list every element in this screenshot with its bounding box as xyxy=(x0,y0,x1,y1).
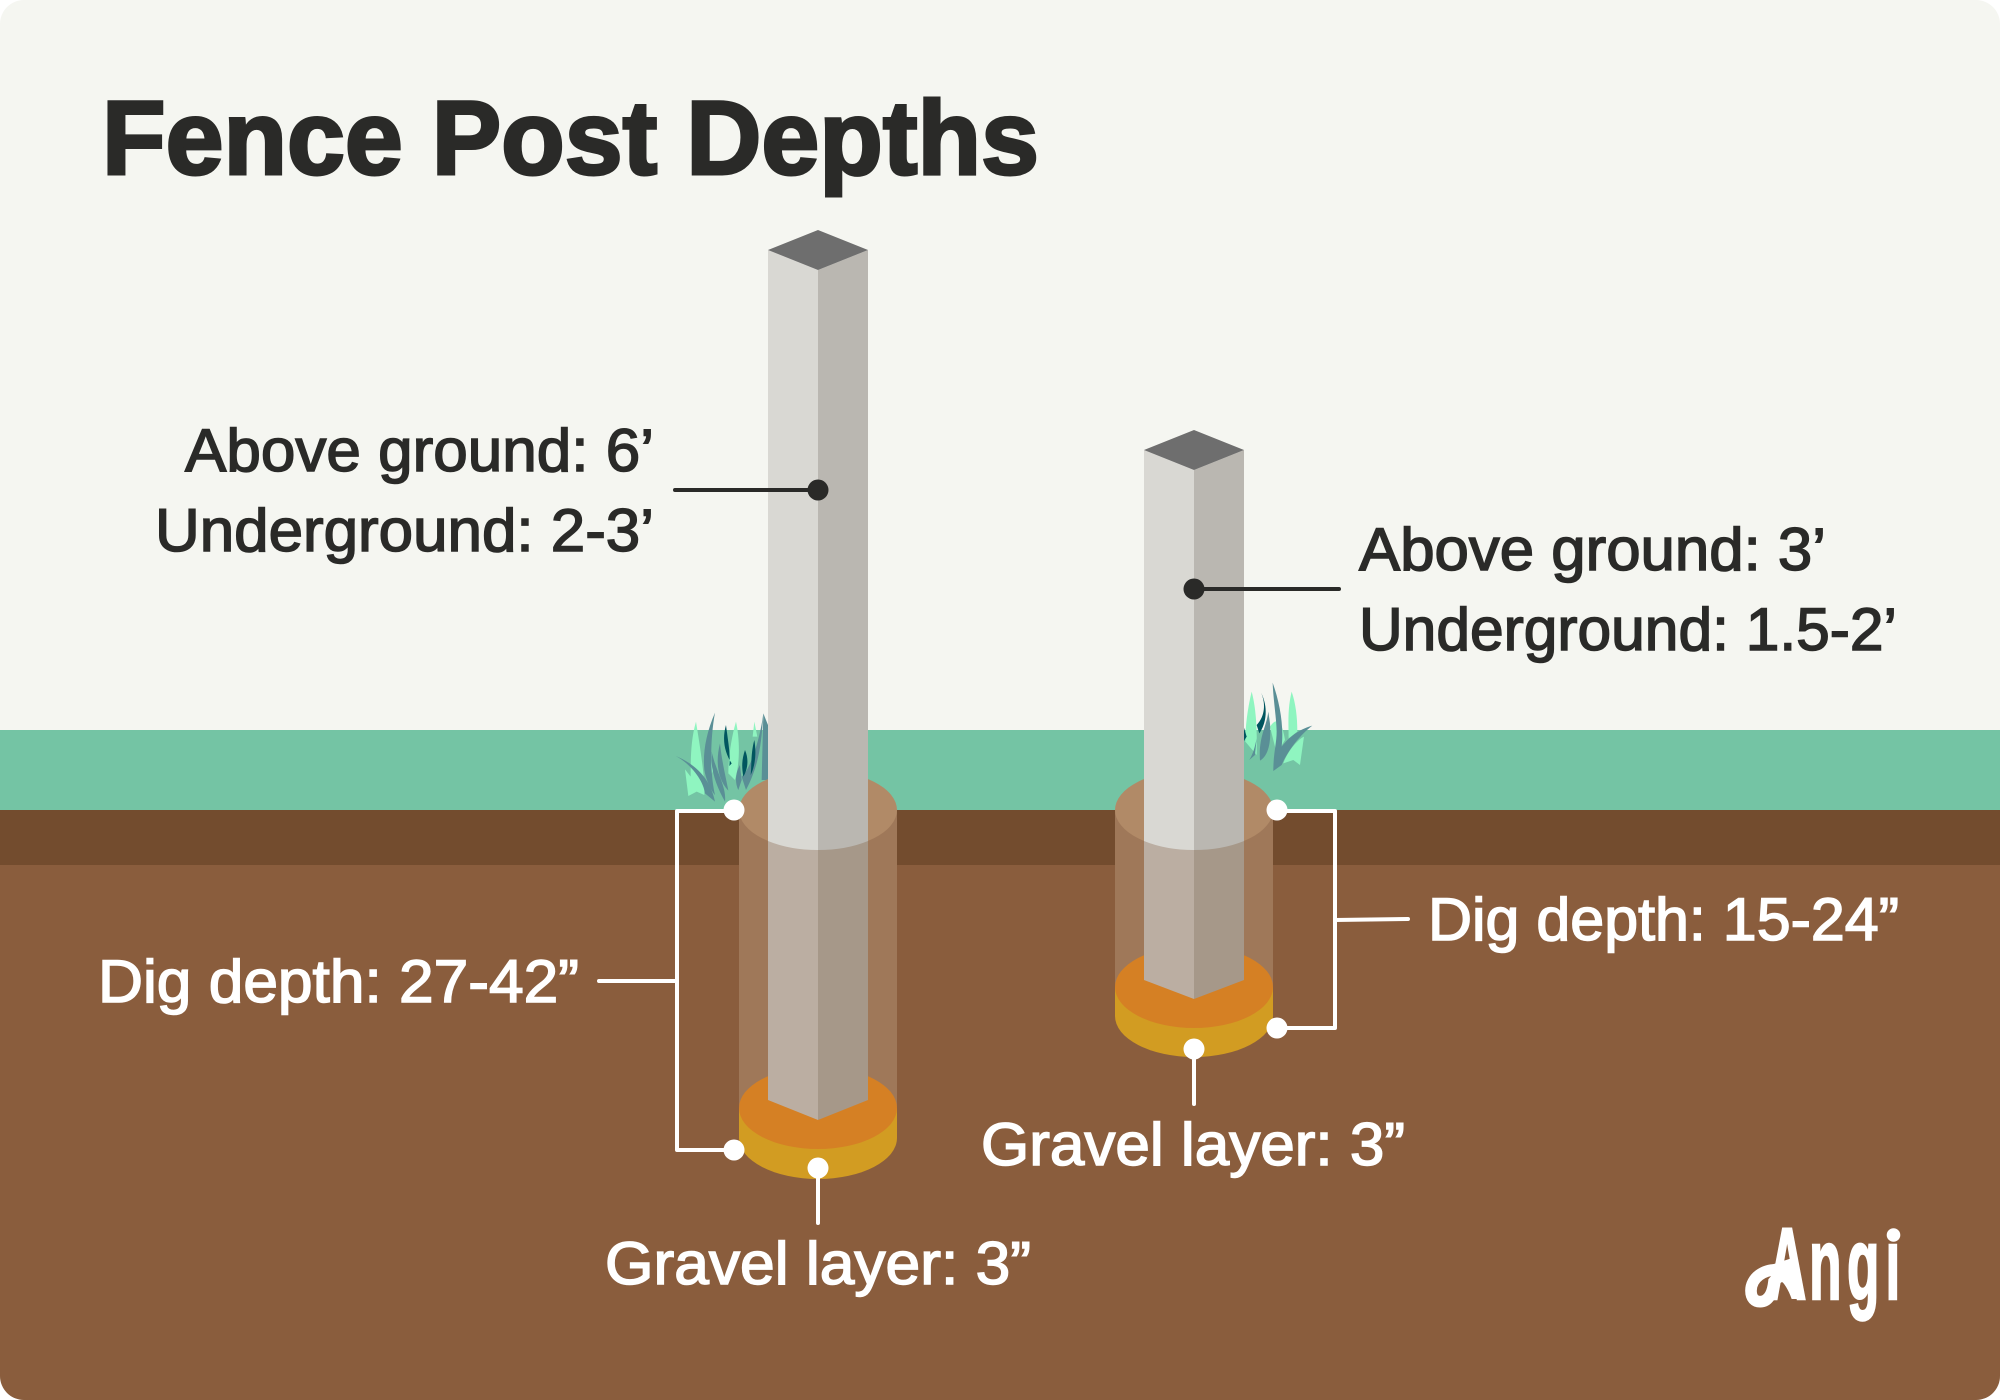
callout: tall post above ground and underground: Above ground: 6’ xyxy=(185,417,654,484)
post assembly: tall fence post in hole xyxy=(739,230,897,1179)
callout: short post dig depth bracket: Dig depth: 15-24” xyxy=(1428,886,1899,953)
fence post: tall xyxy=(768,230,868,1120)
icon: right grass tuft xyxy=(1242,683,1312,771)
title: Fence Post Depths xyxy=(102,80,1039,197)
gravel layer: short post xyxy=(1115,946,1273,1057)
logo: Angi: g xyxy=(1847,1207,1879,1322)
fence post: short xyxy=(1144,430,1244,999)
callout: short post above ground and underground: Underground: 1.5-2’ xyxy=(1359,596,1897,663)
logo: Angi xyxy=(1751,1207,1904,1322)
logo: Angi: A xyxy=(1768,1207,1806,1322)
callout: short post above ground and underground: Above ground: 3’ xyxy=(1359,516,1826,583)
icon: left grass tuft xyxy=(676,713,770,802)
callout: tall post gravel layer: Gravel layer: 3” xyxy=(605,1230,1031,1297)
callout: short post gravel layer: Gravel layer: 3” xyxy=(981,1111,1405,1178)
logo: Angi: n xyxy=(1809,1207,1841,1322)
logo: Angi: i xyxy=(1886,1207,1900,1322)
callout: tall post gravel layer xyxy=(605,1158,1031,1297)
callout: tall post dig depth bracket xyxy=(98,800,744,1160)
callout: short post gravel layer xyxy=(981,1038,1405,1178)
hole: short post xyxy=(1115,770,1273,987)
post assembly: short fence post in hole xyxy=(1115,430,1273,1057)
callout: tall post above ground and underground xyxy=(155,417,828,564)
callout: short post dig depth bracket xyxy=(1266,800,1899,1038)
hole: tall post xyxy=(739,770,897,1108)
gravel layer: tall post xyxy=(739,1067,897,1179)
callout: tall post dig depth bracket: Dig depth: 27-42” xyxy=(98,948,579,1015)
callout: tall post above ground and underground: Underground: 2-3’ xyxy=(155,497,654,564)
callout: short post above ground and underground xyxy=(1184,516,1897,663)
